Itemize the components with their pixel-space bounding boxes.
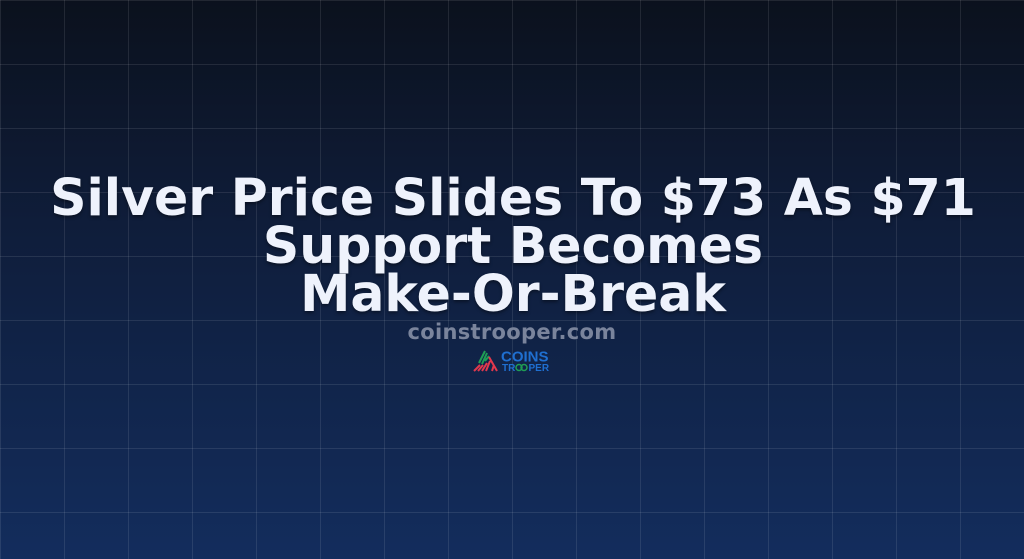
icon: CoinsTrooper logo: TR [502,363,516,374]
website name: coinstrooper.com [408,320,616,344]
title: Make-Or-Break [300,264,726,323]
icon: CoinsTrooper logo: PER [528,363,550,374]
title: Silver Price Slides To $73 As $71 [50,168,976,227]
title: Support Becomes [263,216,763,275]
icon: CoinsTrooper logo [473,348,550,374]
title [50,168,976,323]
icon: CoinsTrooper logo: COINS [501,348,549,366]
